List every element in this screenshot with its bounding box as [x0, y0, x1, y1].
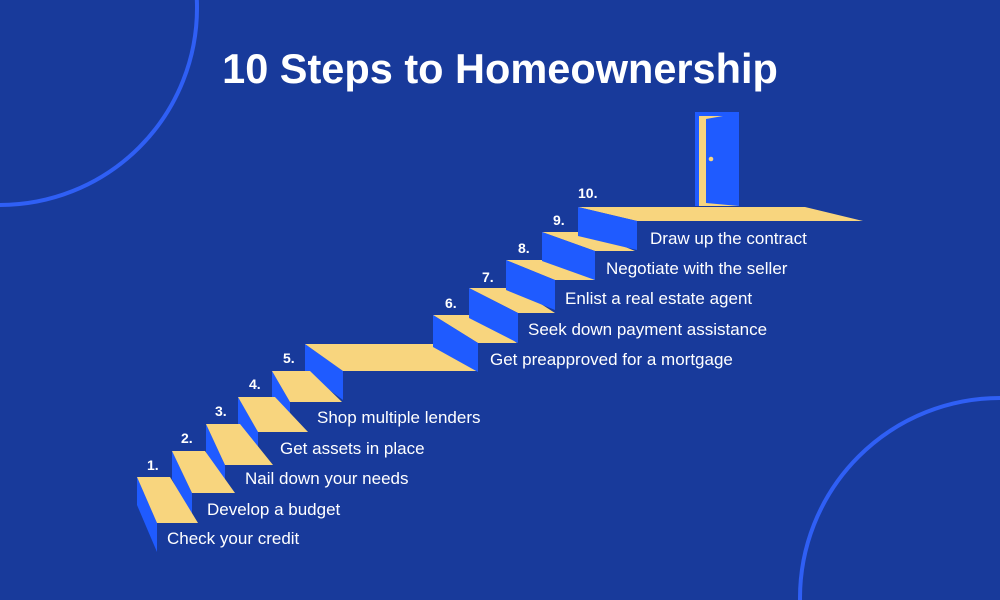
step 3 [206, 424, 273, 493]
step 8 [506, 260, 595, 310]
step 9 [542, 232, 635, 280]
step numbers [147, 185, 597, 473]
step numbers: 10. [578, 185, 597, 201]
step numbers: 7. [482, 269, 494, 285]
step numbers: 6. [445, 295, 457, 311]
step numbers: 1. [147, 457, 159, 473]
step 6 [433, 315, 517, 372]
step numbers: 5. [283, 350, 295, 366]
step labels: Nail down your needs [245, 469, 408, 488]
step labels: Draw up the contract [650, 229, 807, 248]
step 5 [272, 371, 342, 430]
step labels: Shop multiple lenders [317, 408, 480, 427]
step labels: Get assets in place [280, 439, 425, 458]
step labels: Check your credit [167, 529, 300, 548]
icon: door [695, 112, 739, 206]
staircase [137, 112, 863, 552]
step 10 [578, 207, 863, 250]
step 4 [238, 397, 308, 460]
step labels [167, 229, 807, 548]
step numbers: 3. [215, 403, 227, 419]
step 1 [137, 477, 198, 552]
step numbers: 4. [249, 376, 261, 392]
step numbers: 8. [518, 240, 530, 256]
step 2 [172, 451, 235, 522]
step labels: Negotiate with the seller [606, 259, 788, 278]
step labels: Get preapproved for a mortgage [490, 350, 733, 369]
step labels: Enlist a real estate agent [565, 289, 752, 308]
step numbers: 2. [181, 430, 193, 446]
step labels: Develop a budget [207, 500, 341, 519]
title: 10 Steps to Homeownership [222, 45, 778, 92]
step numbers: 9. [553, 212, 565, 228]
landing [305, 344, 477, 400]
step labels: Seek down payment assistance [528, 320, 767, 339]
step 7 [469, 288, 555, 343]
